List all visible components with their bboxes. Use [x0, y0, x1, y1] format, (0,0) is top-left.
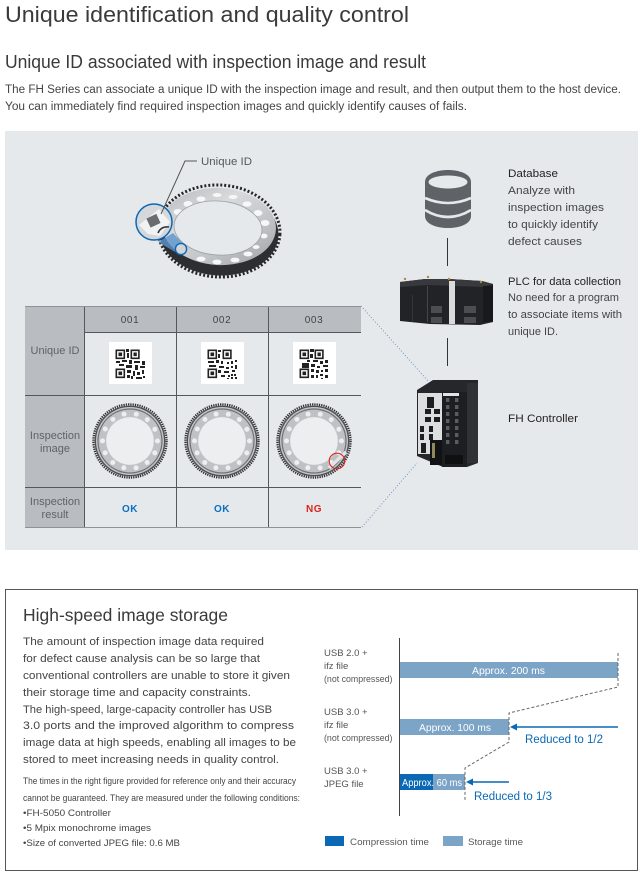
bar values: Approx. 200 ms [472, 665, 545, 677]
intro text [5, 84, 621, 113]
row labels [324, 648, 393, 790]
column ids [121, 315, 323, 326]
column ids: 003 [305, 315, 323, 326]
description: database: defect causes [508, 236, 583, 248]
row labels: USB 3.0 + [324, 766, 368, 777]
bar values: Approx. 60 ms [402, 777, 462, 789]
chart: storage time comparison [324, 638, 618, 816]
icon: database [425, 170, 471, 228]
QR code 001 [109, 342, 152, 384]
dotted connectors: table to controller [361, 306, 429, 527]
intro text: You can immediately find required inspection images and quickly identify causes of fails. [5, 101, 467, 113]
panel: grey background [5, 131, 638, 550]
footnote: •FH-5050 Controller [23, 808, 111, 818]
icon: PLC [400, 276, 493, 325]
row label: inspection result: result [42, 509, 68, 521]
footnote: The times in the right figure provided for reference only and their accuracy [23, 776, 296, 786]
legend: Compression time [350, 837, 429, 848]
body text: for defect cause analysis can be so large that [23, 653, 261, 665]
inspection image 002 [185, 404, 259, 478]
panel: high-speed image storage [6, 590, 638, 870]
legend: Storage time [468, 837, 523, 848]
description: PLC: unique ID. [508, 326, 558, 338]
arrow: reduced to 1/2 [510, 724, 618, 730]
intro text: The FH Series can associate a unique ID with the inspection image and result, and then output them to the host device. [5, 84, 621, 96]
body text: 3.0 ports and the improved algorithm to compress [23, 720, 294, 732]
row label: inspection result [30, 496, 80, 521]
connector: PLC to controller [446, 338, 448, 366]
body text: The high-speed, large-capacity controller has USB [23, 704, 272, 716]
description: FH controller: FH Controller [508, 413, 578, 425]
body text: The amount of inspection image data required [23, 636, 264, 648]
description: database: Database [508, 168, 558, 180]
footnote: •5 Mpix monochrome images [23, 823, 152, 833]
label: reduced to 1/2: Reduced to 1/2 [525, 734, 603, 746]
title: Unique identification and quality control [5, 2, 409, 27]
axis [398, 638, 400, 816]
QR code 003 [293, 342, 336, 384]
body text: stored to meet increasing needs in quality control. [23, 754, 279, 766]
legend [325, 836, 523, 848]
body text [23, 636, 296, 766]
heading: high-speed image storage: High-speed image storage [23, 605, 228, 625]
row labels: JPEG file [324, 779, 364, 790]
inspection image 003 with defect [277, 404, 351, 478]
table: inspection results [25, 306, 361, 528]
footnote: cannot be guaranteed. They are measured under the following conditions: [23, 793, 300, 803]
description: database: to quickly identify [508, 219, 599, 231]
bar values [402, 665, 545, 789]
row labels: ifz file [324, 720, 348, 731]
bar: USB 2.0 [400, 662, 618, 678]
bar: USB 3.0 ifz [400, 719, 509, 735]
heading: unique ID: Unique ID associated with inspection image and result [5, 52, 426, 72]
row label: inspection image: Inspection [30, 430, 80, 442]
column ids: 002 [213, 315, 231, 326]
description: database: Analyze with [508, 185, 575, 197]
row label: inspection image: image [40, 443, 70, 455]
QR code 002 [201, 342, 244, 384]
label: unique ID: Unique ID [201, 156, 252, 168]
results: OK [214, 504, 230, 515]
row labels: ifz file [324, 661, 348, 672]
body text: image data at high speeds, enabling all images to be [23, 737, 296, 749]
connector: database to PLC [446, 238, 448, 266]
row labels: USB 2.0 + [324, 648, 368, 659]
description: PLC: to associate items with [508, 309, 622, 321]
row labels: USB 3.0 + [324, 707, 368, 718]
row label: unique ID: Unique ID [31, 345, 80, 357]
footnote [23, 776, 300, 848]
bar values: Approx. 100 ms [419, 722, 491, 734]
description: PLC [508, 276, 622, 338]
icon: gear with unique ID [136, 182, 282, 280]
row labels: (not compressed) [324, 733, 393, 743]
row label: inspection image [30, 430, 80, 455]
label: reduced to 1/3: Reduced to 1/3 [474, 791, 552, 803]
leader line: unique ID [161, 161, 197, 214]
row labels: (not compressed) [324, 674, 393, 684]
dashed guides [465, 653, 618, 801]
arrow: reduced to 1/3 [466, 778, 509, 786]
body text: conventional controllers are unable to store it given [23, 670, 290, 682]
footnote: •Size of converted JPEG file: 0.6 MB [23, 838, 180, 848]
row label: inspection result: Inspection [30, 496, 80, 508]
description: PLC: No need for a program [508, 292, 619, 304]
results [122, 504, 322, 515]
inspection image 001 [93, 404, 167, 478]
body text: their storage time and capacity constraints. [23, 687, 251, 699]
icon: FH controller [417, 380, 478, 467]
description: database: inspection images [508, 202, 605, 214]
results: OK [122, 504, 138, 515]
description: database [508, 168, 605, 248]
description: PLC: PLC for data collection [508, 276, 621, 288]
column ids: 001 [121, 315, 139, 326]
results: NG [306, 504, 322, 515]
bar: USB 3.0 JPEG [400, 774, 465, 790]
